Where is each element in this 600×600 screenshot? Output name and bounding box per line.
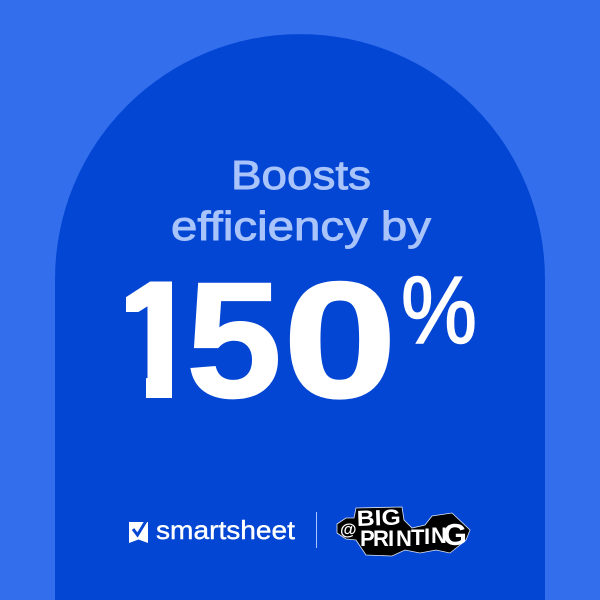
infographic canvas <box>55 34 545 600</box>
logo text: PRINTING: N <box>431 523 447 548</box>
logo: Big Printing <box>337 504 470 556</box>
logo text: PRINTING: T <box>411 525 425 550</box>
logo text: PRINTING: P <box>360 526 375 551</box>
big number: 150%: % <box>401 257 477 364</box>
big number: 150%: 0 <box>283 248 397 432</box>
logo text: PRINTING: N <box>396 526 412 551</box>
logo backing shape <box>337 507 470 556</box>
logo text: PRINTING: I <box>388 526 394 551</box>
heading: Boosts efficiency by <box>171 152 432 249</box>
divider between logos <box>316 512 317 548</box>
big number: 150%: 5 <box>186 248 282 432</box>
heading: Boosts efficiency by: Boosts <box>231 152 371 198</box>
icon: smartsheet check mark <box>129 521 148 543</box>
logo: smartsheet <box>129 515 296 545</box>
logo text: final G: G <box>443 517 467 552</box>
heading: Boosts efficiency by: efficiency by <box>171 203 432 249</box>
logo text: BIG: BIG <box>356 504 401 531</box>
logo text: @: @ <box>340 520 357 539</box>
panel: arch background <box>55 34 545 600</box>
big number: 150% <box>126 276 475 400</box>
big number: 150%: 1 <box>111 248 203 432</box>
wordmark: smartsheet: smartsheet <box>156 515 296 545</box>
logo text: PRINTING: R <box>373 526 389 551</box>
logo text: PRINTING: I <box>424 524 430 549</box>
